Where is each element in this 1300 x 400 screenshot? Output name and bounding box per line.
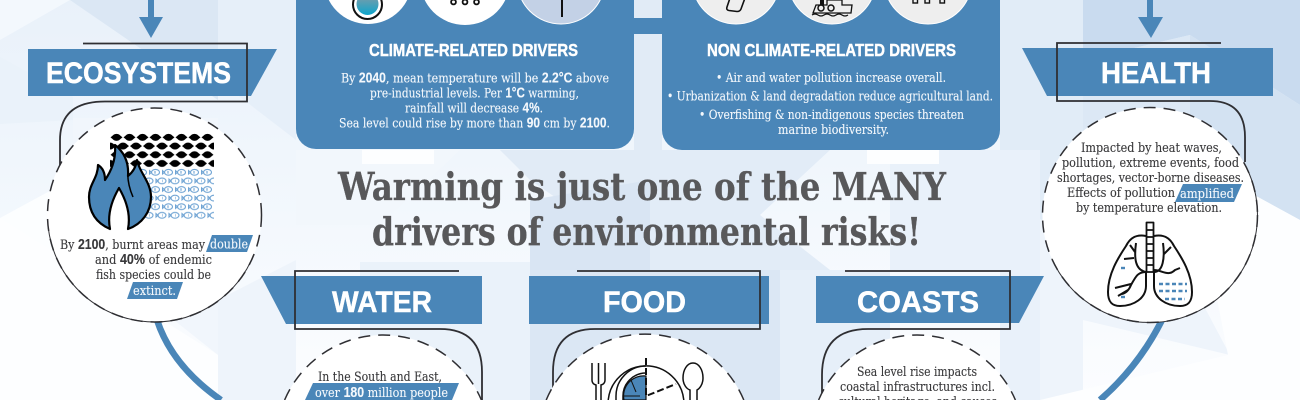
heading: health: HEALTH <box>1101 57 1211 90</box>
connector between driver panels <box>630 18 670 34</box>
circle: water <box>285 335 481 400</box>
heading: ecosystems: ECOSYSTEMS <box>46 57 231 90</box>
text: health body: shortages, vector-borne diseases. <box>1057 171 1244 186</box>
text: water body: In the South and East, <box>318 370 442 385</box>
icon: ship <box>788 0 876 24</box>
icon: eye lens <box>324 0 412 24</box>
headline: drivers of environmental risks! <box>372 209 921 254</box>
circle: food <box>546 334 744 400</box>
circle: health <box>1042 108 1258 322</box>
text: water body <box>305 370 459 400</box>
text: health body: pollution, extreme events, food <box>1062 156 1239 171</box>
arc: health to coasts <box>1100 320 1162 400</box>
banner: water <box>261 276 482 324</box>
section: food <box>529 271 769 400</box>
text: health body: Effects of pollution <box>1067 186 1175 201</box>
text: coasts body <box>838 365 997 400</box>
text: ecosystems body: By 2100, burnt areas may <box>60 237 205 253</box>
icon: spoon <box>683 363 703 400</box>
text: non climate drivers body: marine biodiversity. <box>778 123 889 138</box>
icon: pie wedge <box>624 376 646 400</box>
banner: coasts <box>816 276 1044 323</box>
heading: food: FOOD <box>603 286 686 319</box>
frame: coasts <box>822 271 1010 400</box>
section: health <box>1022 0 1273 322</box>
frame: food <box>553 271 760 400</box>
heading: climate-related drivers: CLIMATE-RELATED DRIVERS <box>369 40 578 60</box>
text: health body: Impacted by heat waves, <box>1081 141 1222 156</box>
icon: fish grid <box>110 133 214 220</box>
text: non climate drivers body: • Overfishing & non-indigenous species threaten <box>699 108 964 123</box>
icon: lungs <box>1108 222 1192 306</box>
highlight: amplified: amplified <box>1180 187 1234 202</box>
frame: ecosystems <box>60 44 247 165</box>
arrow: into health <box>1138 0 1163 38</box>
icon: tilted canister <box>692 0 780 24</box>
icon: factory <box>884 0 972 24</box>
text: climate drivers body: Sea level could rise by more than 90 cm by 2100. <box>339 116 610 132</box>
arc: ecosystems to water <box>157 320 221 400</box>
text: ecosystems body: and 40% of endemic <box>95 252 212 268</box>
text: climate drivers body: By 2040, mean temperature will be 2.2°C above <box>341 70 609 86</box>
text: non climate drivers body <box>667 71 993 138</box>
icon: plate and cutlery <box>592 358 703 400</box>
text: ecosystems body: fish species could be <box>96 268 211 283</box>
headline <box>337 164 947 254</box>
headline: Warming is just one of the MANY <box>337 164 947 209</box>
text: non climate drivers body: • Urbanization & land degradation reduce agricultural land. <box>667 90 993 104</box>
panel: climate-related drivers <box>296 0 634 149</box>
icon: plate rings <box>608 366 684 400</box>
banner: ecosystems <box>28 49 277 96</box>
icon: lung dots <box>1121 268 1187 299</box>
text: coasts body: Sea level rise impacts <box>857 365 977 380</box>
frame: water <box>295 271 482 400</box>
section: ecosystems <box>28 0 277 322</box>
circle: ecosystems <box>48 108 262 322</box>
highlight: extinct: extinct. <box>133 284 176 299</box>
heading: water: WATER <box>332 286 432 319</box>
icon: flame <box>89 145 151 229</box>
text: climate drivers body: rainfall will decrease 4%. <box>405 100 543 116</box>
panel: non climate-related drivers <box>662 0 1000 150</box>
highlight: double: double <box>210 238 248 252</box>
section: coasts <box>816 271 1044 400</box>
banner: food <box>529 276 769 324</box>
banner: health <box>1022 48 1273 96</box>
arrow: into ecosystems <box>139 0 163 38</box>
heading: non climate-related drivers: NON CLIMATE-RELATED DRIVERS <box>707 40 956 60</box>
icon: dotted circle <box>420 0 510 25</box>
text: coasts body: coastal infrastructures incl. <box>840 380 995 395</box>
text: ecosystems body <box>60 235 253 299</box>
frame: health <box>1057 43 1245 162</box>
heading: coasts: COASTS <box>857 286 979 319</box>
text: climate drivers body <box>339 70 610 132</box>
text: health body <box>1057 141 1244 216</box>
text: climate drivers body: pre-industrial levels. Per 1°C warming, <box>370 86 579 102</box>
text: non climate drivers body: • Air and water pollution increase overall. <box>716 71 946 86</box>
circle: coasts <box>819 335 1015 400</box>
icon: fork <box>592 363 605 400</box>
text: health body: by temperature elevation. <box>1076 201 1222 216</box>
icon: thermometer dial <box>517 0 605 24</box>
section: water <box>261 271 482 400</box>
